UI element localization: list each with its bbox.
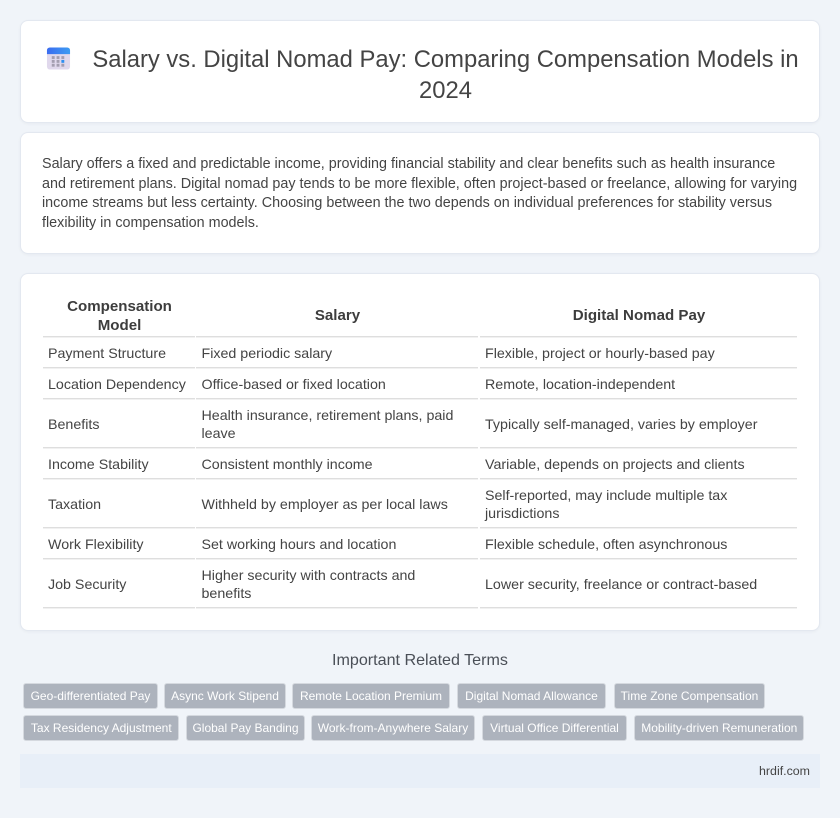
row: benefits bbox=[48, 408, 758, 442]
intro paragraph: and retirement plans. Digital nomad pay tends to be more flexible, often project-based or freelance, allowing for varying bbox=[42, 176, 797, 192]
row: income stability: Consistent monthly income bbox=[202, 457, 373, 473]
tags: related terms: Time Zone Compensation bbox=[621, 689, 758, 703]
row: work flexibility bbox=[48, 537, 727, 553]
row: taxation bbox=[48, 488, 728, 522]
row: job security: Higher security with contracts and bbox=[202, 568, 415, 584]
row: job security: Job Security bbox=[48, 577, 126, 593]
row: location dependency bbox=[48, 377, 675, 393]
row: taxation: Taxation bbox=[48, 497, 101, 513]
row: payment structure: Payment Structure bbox=[48, 346, 166, 362]
row: work flexibility: Work Flexibility bbox=[48, 537, 144, 553]
intro paragraph: income streams but less certainty. Choosing between the two depends on individual preferences for stability versus bbox=[42, 195, 772, 211]
row: location dependency: Remote, location-independent bbox=[485, 377, 675, 393]
heading: related terms: Important Related Terms bbox=[332, 651, 508, 669]
row: taxation: Withheld by employer as per local laws bbox=[202, 497, 448, 513]
tags: related terms: Global Pay Banding bbox=[192, 721, 299, 735]
tags: related terms: Mobility-driven Remuneration bbox=[641, 721, 797, 735]
row: payment structure bbox=[48, 346, 715, 362]
row: job security: Lower security, freelance or contract-based bbox=[485, 577, 757, 593]
row: payment structure: Flexible, project or hourly-based pay bbox=[485, 346, 715, 362]
panel: title card bbox=[20, 20, 820, 123]
table header bbox=[67, 298, 706, 334]
tags: related terms: Async Work Stipend bbox=[171, 689, 279, 703]
panel: comparison table bbox=[20, 273, 820, 631]
row: taxation: Self-reported, may include multiple tax bbox=[485, 488, 727, 504]
row: payment structure: Fixed periodic salary bbox=[202, 346, 332, 362]
icon: calendar bbox=[46, 48, 70, 70]
intro paragraph: flexibility in compensation models. bbox=[42, 215, 259, 231]
tags: related terms: Geo-differentiated Pay bbox=[31, 689, 150, 703]
intro paragraph bbox=[42, 156, 797, 231]
row: benefits: Typically self-managed, varies by employer bbox=[485, 417, 757, 433]
table header: Salary bbox=[315, 307, 360, 324]
table header: Digital Nomad Pay bbox=[573, 307, 705, 324]
title: Salary vs. Digital Nomad Pay: Comparing Compensation Models in 2024 bbox=[92, 46, 799, 104]
panel: intro text bbox=[20, 132, 820, 254]
row: job security bbox=[48, 568, 757, 602]
tags: related terms: Remote Location Premium bbox=[300, 689, 442, 703]
footer bbox=[20, 754, 820, 788]
tags: related terms: Digital Nomad Allowance bbox=[465, 689, 598, 703]
tags: related terms: Work-from-Anywhere Salary bbox=[318, 721, 468, 735]
row: income stability: Variable, depends on projects and clients bbox=[485, 457, 745, 473]
row: benefits: Benefits bbox=[48, 417, 100, 433]
row: location dependency: Location Dependency bbox=[48, 377, 186, 393]
row: location dependency: Office-based or fixed location bbox=[202, 377, 386, 393]
row: job security: benefits bbox=[202, 586, 251, 602]
row: taxation: jurisdictions bbox=[485, 506, 559, 522]
table header: Model bbox=[98, 317, 141, 334]
row: benefits: leave bbox=[202, 426, 236, 442]
row: benefits: Health insurance, retirement plans, paid bbox=[202, 408, 453, 424]
table header: Compensation bbox=[67, 298, 172, 315]
tags: related terms bbox=[23, 683, 804, 741]
row: income stability: Income Stability bbox=[48, 457, 149, 473]
row: work flexibility: Set working hours and location bbox=[202, 537, 396, 553]
tags: related terms: Tax Residency Adjustment bbox=[31, 721, 172, 735]
intro paragraph: Salary offers a fixed and predictable income, providing financial stability and clear benefits such as health insurance bbox=[42, 156, 775, 172]
row: income stability bbox=[48, 457, 745, 473]
tags: related terms: Virtual Office Differential bbox=[490, 721, 619, 735]
row: work flexibility: Flexible schedule, often asynchronous bbox=[485, 537, 727, 553]
source: hrdif.com bbox=[759, 764, 810, 778]
